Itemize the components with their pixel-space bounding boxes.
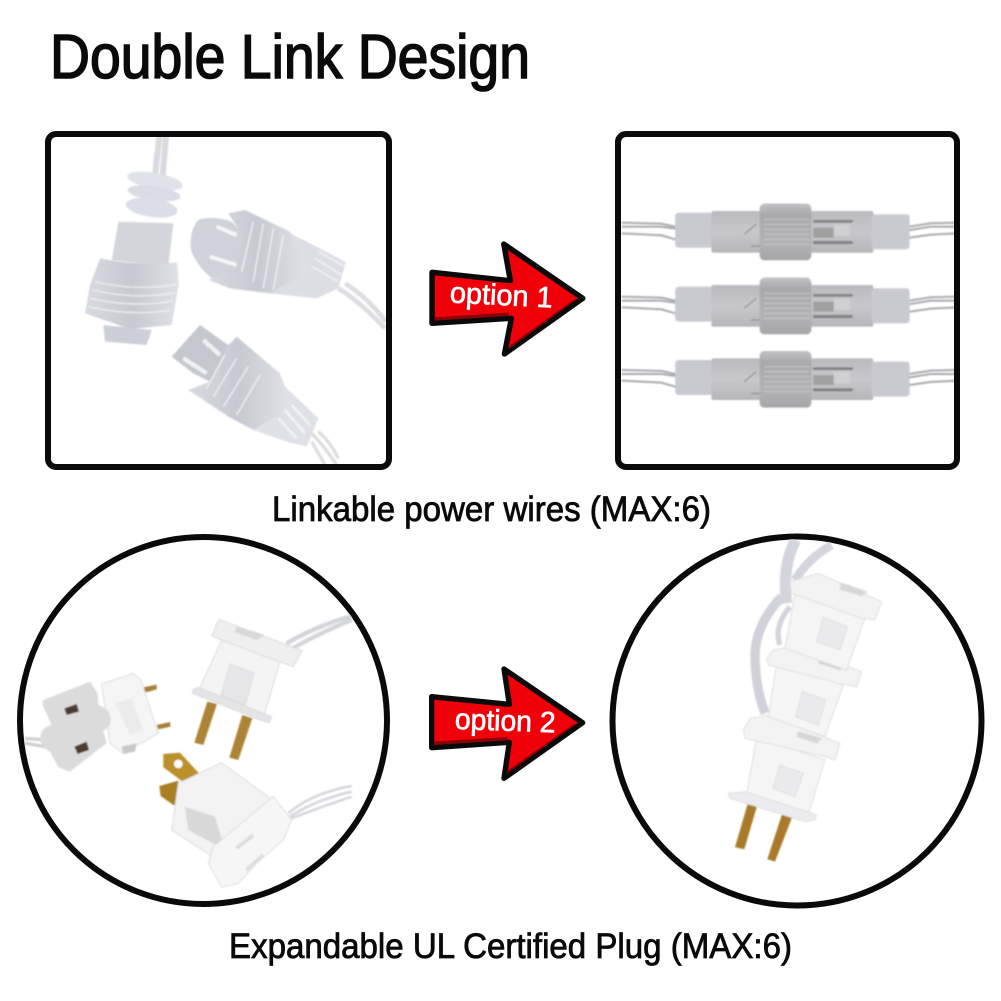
linked connector: top	[622, 204, 958, 260]
panel: loose waterproof connectors	[48, 134, 389, 467]
linked connector: bottom	[622, 351, 958, 408]
caption: linkable power wires: Linkable power wires (MAX:6)	[272, 490, 711, 529]
photo: three stacked plugs	[728, 540, 882, 862]
plug stack: top plug	[785, 573, 882, 670]
plug: left socket	[25, 673, 170, 772]
connector: upper right	[191, 210, 386, 328]
plug: lower, prongs up	[159, 753, 352, 887]
photo: three separate plugs	[25, 616, 352, 887]
arrow: option 1	[432, 244, 583, 354]
title: Double Link Design	[50, 23, 530, 92]
panel: linked waterproof connectors	[618, 134, 958, 467]
connector: lower	[172, 325, 338, 465]
caption: expandable UL certified plug: Expandable UL Certified Plug (MAX:6)	[229, 927, 792, 966]
plug stack: bottom plug	[728, 715, 840, 822]
arrow: option 2	[432, 669, 583, 778]
plug stack: middle plug	[767, 647, 862, 737]
panel: loose plugs circle	[20, 537, 387, 904]
label: option 2: option 2	[454, 703, 556, 739]
linked connector: middle	[622, 278, 958, 334]
plug: top, prongs down	[192, 616, 352, 760]
connector: upper left	[85, 137, 184, 345]
photo: three linked connectors	[622, 204, 958, 408]
photo: three unplugged clear connectors	[85, 137, 386, 465]
panel: stacked plugs circle	[612, 536, 982, 906]
wires	[755, 540, 832, 713]
label: option 1: option 1	[449, 277, 554, 314]
plug stack: prong blades	[735, 802, 792, 862]
